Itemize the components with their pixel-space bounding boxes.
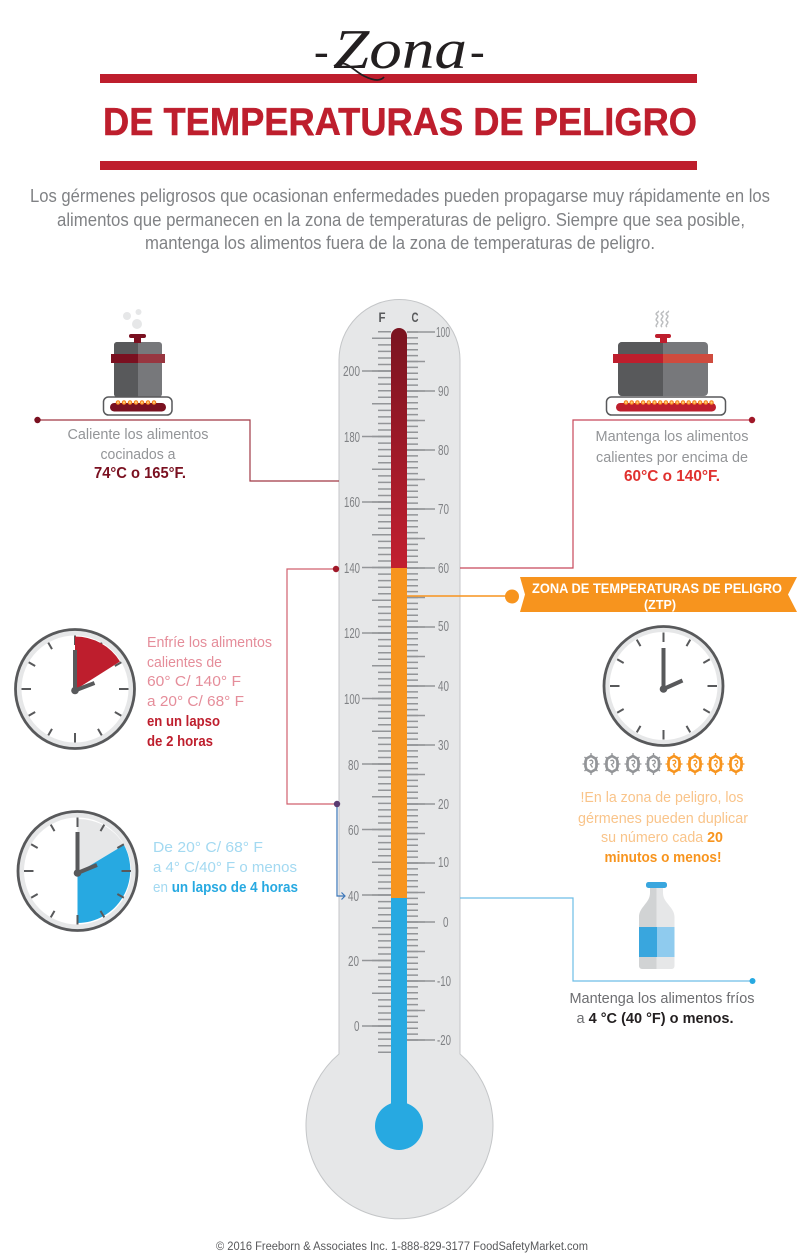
fahrenheit labels: 20 bbox=[348, 954, 359, 970]
footer: © 2016 Freeborn & Associates Inc. 1-888-829-3177 FoodSafetyMarket.com bbox=[216, 1241, 588, 1253]
intro text: mantenga los alimentos fuera de la zona de temperaturas de peligro. bbox=[145, 233, 655, 253]
title: Zona: - bbox=[314, 27, 329, 76]
text: keep cold food bbox=[570, 991, 754, 1027]
text: keep cold food: Mantenga los alimentos fríos bbox=[570, 991, 754, 1007]
fahrenheit labels: 140 bbox=[344, 561, 360, 577]
text: cool within four hours: en un lapso de 4 horas bbox=[153, 880, 298, 896]
connector: danger zone bbox=[407, 590, 519, 604]
icon: milk bottle bbox=[639, 882, 675, 969]
celsius labels: -20 bbox=[437, 1033, 451, 1049]
fahrenheit labels: 60 bbox=[348, 823, 359, 839]
intro text: alimentos que permanecen en la zona de temperaturas de peligro. Siempre que sea posible, bbox=[57, 210, 745, 230]
fahrenheit labels: 120 bbox=[344, 626, 360, 642]
text: cool within two hours: Enfríe los alimentos bbox=[147, 635, 272, 651]
text: cool within two hours: de 2 horas bbox=[147, 734, 213, 750]
fahrenheit labels: 180 bbox=[344, 430, 360, 446]
clock: four hours cooling bbox=[18, 812, 137, 930]
text: keep cold food: a 4 °C (40 °F) o menos. bbox=[576, 1011, 734, 1027]
scale headers: F bbox=[378, 309, 386, 325]
celsius labels: 20 bbox=[438, 797, 449, 813]
text: cool within two hours: en un lapso bbox=[147, 714, 220, 730]
celsius labels: 50 bbox=[438, 619, 449, 635]
connector: cold food bbox=[460, 898, 756, 984]
fahrenheit labels: 80 bbox=[348, 758, 359, 774]
celsius labels: 90 bbox=[438, 384, 449, 400]
text: cool within four hours: a 4° C/40° F o menos bbox=[153, 860, 297, 876]
text: germs double bbox=[578, 790, 748, 866]
clock: danger zone bbox=[604, 626, 723, 746]
celsius labels: 40 bbox=[438, 679, 449, 695]
fahrenheit labels: 0 bbox=[354, 1019, 360, 1035]
fahrenheit labels bbox=[343, 364, 360, 1035]
fahrenheit labels: 40 bbox=[348, 889, 359, 905]
text: germs double: su número cada 20 bbox=[601, 830, 723, 846]
text: germs double: minutos o menos! bbox=[604, 850, 722, 866]
icons: germs multiplying bbox=[582, 753, 744, 775]
celsius labels: 100 bbox=[436, 325, 450, 341]
icon: large pot on burner bbox=[606, 311, 726, 415]
red rule bottom bbox=[100, 161, 697, 170]
text: germs double: !En la zona de peligro, los bbox=[580, 790, 744, 806]
clock: two hours cooling bbox=[16, 630, 134, 748]
banner: danger zone: (ZTP) bbox=[644, 597, 676, 612]
fahrenheit labels: 160 bbox=[344, 495, 360, 511]
heading: DE TEMPERATURAS DE PELIGRO bbox=[103, 101, 697, 144]
celsius labels: 60 bbox=[438, 561, 449, 577]
celsius labels: 30 bbox=[438, 738, 449, 754]
connector: cooling stages bbox=[287, 566, 345, 900]
text: cool within two hours: 60° C/ 140° F bbox=[147, 674, 241, 690]
celsius labels bbox=[436, 325, 451, 1049]
mercury column bbox=[375, 328, 423, 1150]
celsius labels: 0 bbox=[443, 915, 448, 931]
text: heat cooked food: cocinados a bbox=[100, 447, 176, 463]
text: keep hot food: 60°C o 140°F. bbox=[624, 468, 720, 485]
thermometer body bbox=[306, 299, 493, 1219]
banner: danger zone bbox=[520, 577, 797, 612]
celsius labels: -10 bbox=[437, 974, 451, 990]
title: Zona: Zona bbox=[333, 19, 467, 81]
fahrenheit labels: 100 bbox=[344, 692, 360, 708]
text: keep hot food: Mantenga los alimentos bbox=[596, 429, 748, 445]
thermometer bbox=[306, 299, 493, 1219]
fahrenheit scale ticks bbox=[376, 331, 384, 1053]
title: Zona: - bbox=[470, 27, 485, 76]
text: cool within two hours bbox=[147, 635, 272, 750]
text: cool within two hours: calientes de bbox=[147, 655, 222, 671]
scale headers: C bbox=[412, 309, 418, 325]
banner: danger zone: ZONA DE TEMPERATURAS DE PELIGRO bbox=[532, 581, 782, 596]
text: germs double: gérmenes pueden duplicar bbox=[578, 811, 748, 827]
text: heat cooked food bbox=[68, 427, 208, 482]
connector: hot food left bbox=[34, 417, 339, 481]
text: keep hot food bbox=[596, 429, 748, 485]
celsius labels: 80 bbox=[438, 443, 449, 459]
red rule top bbox=[100, 74, 697, 83]
connector: hot food right bbox=[460, 417, 755, 568]
title: Zona bbox=[314, 19, 485, 81]
text: heat cooked food: Caliente los alimentos bbox=[68, 427, 208, 443]
text: cool within four hours bbox=[153, 840, 298, 896]
text: keep hot food: calientes por encima de bbox=[596, 450, 748, 466]
celsius labels: 70 bbox=[438, 502, 449, 518]
scale headers bbox=[378, 309, 418, 325]
text: cool within two hours: a 20° C/ 68° F bbox=[147, 694, 244, 710]
fahrenheit labels: 200 bbox=[343, 364, 360, 380]
icon: small pot on burner bbox=[104, 309, 172, 415]
text: cool within four hours: De 20° C/ 68° F bbox=[153, 840, 263, 856]
intro text bbox=[30, 186, 770, 253]
celsius scale ticks bbox=[412, 331, 421, 1042]
celsius labels: 10 bbox=[438, 855, 449, 871]
text: heat cooked food: 74°C o 165°F. bbox=[94, 465, 186, 482]
